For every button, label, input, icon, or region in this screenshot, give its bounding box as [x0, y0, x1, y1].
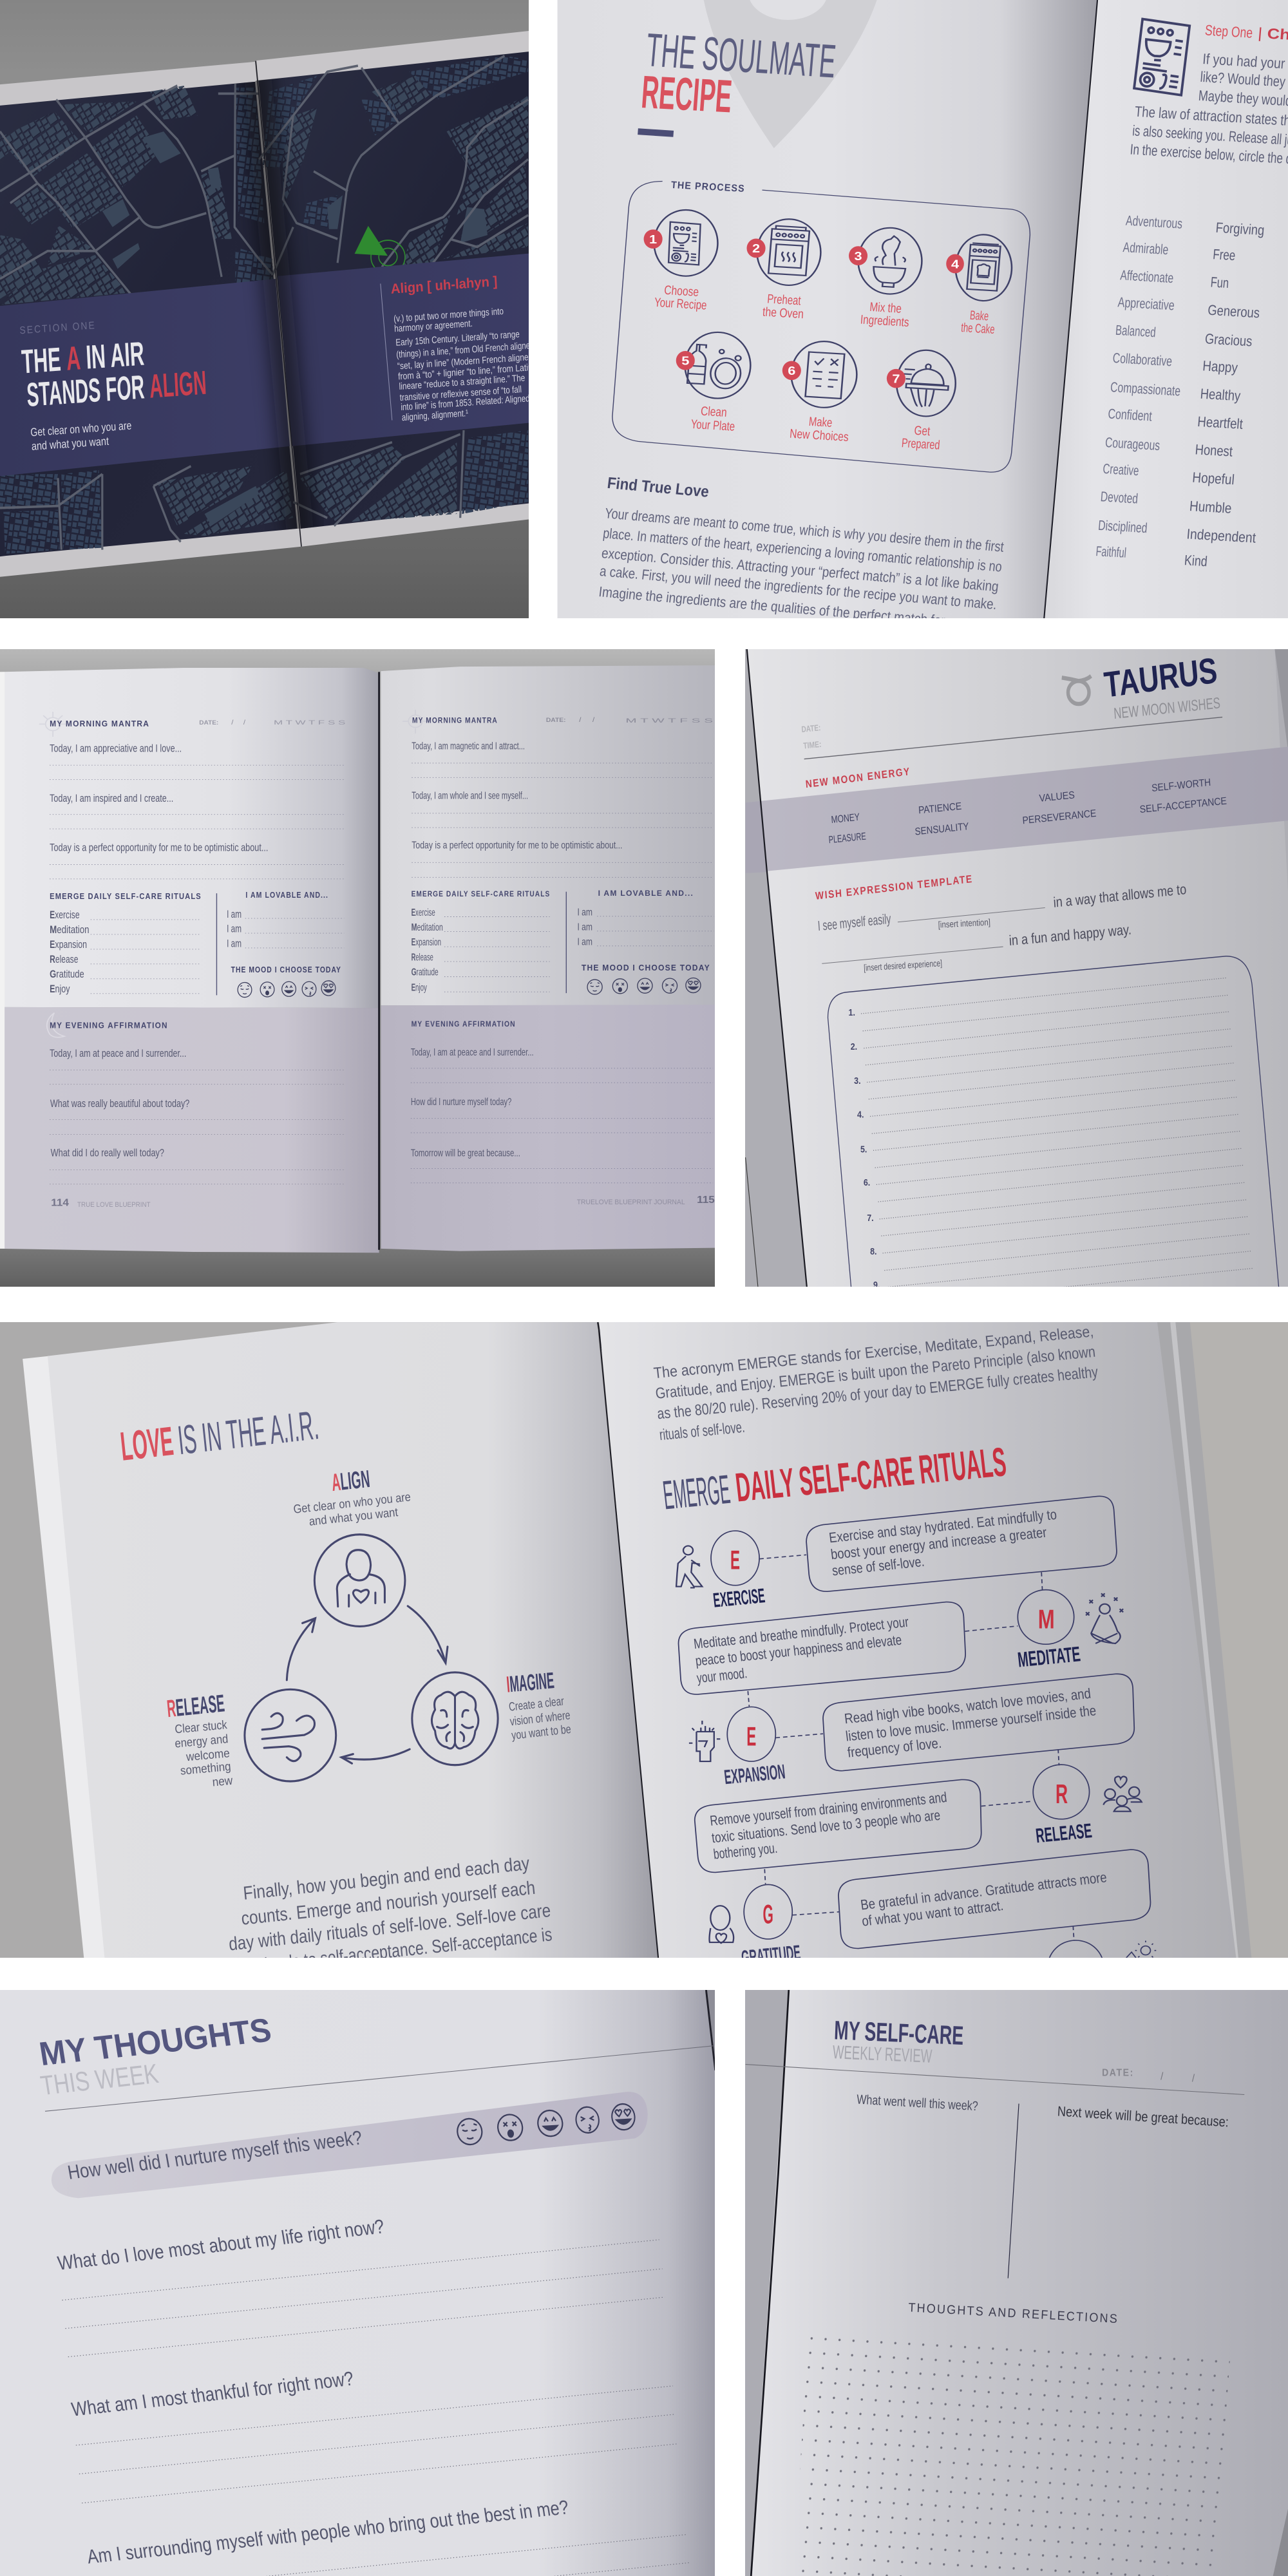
- release label: new: [212, 1773, 233, 1789]
- body text: a cake. First, you will need the ingredients for the recipe you want to make.: [599, 564, 998, 613]
- intro paragraph: rituals of self-love.: [659, 1419, 746, 1444]
- energy keywords: VALUES: [1039, 790, 1075, 804]
- morning prompts: [412, 740, 713, 877]
- panel: the soulmate recipe spread: THE SOULMATE: [644, 23, 838, 88]
- morning mantra header: M T W T F S S: [274, 719, 345, 726]
- question: love most: [56, 2215, 665, 2357]
- step 5: clean your plate: [676, 332, 750, 433]
- panel: the process box: THE PROCESS: [670, 179, 745, 194]
- definition text: from à “to” + lignier “to line,” from Latin: [398, 361, 533, 382]
- definition text: (v.) to put two or more things into: [393, 305, 504, 324]
- new moon energy heading: NEW MOON ENERGY: [805, 766, 911, 791]
- mood selector: THE MOOD I CHOOSE TODAY: [231, 965, 341, 974]
- evening affirmation: What was really beautiful about today?: [50, 1097, 189, 1110]
- date and time: DATE:: [801, 723, 821, 734]
- question: surrounding myself: [86, 2496, 689, 2576]
- date and time: TIME:: [803, 739, 822, 751]
- step: release: R: [1056, 1780, 1068, 1810]
- align label: Get clear on who you are: [293, 1490, 412, 1516]
- step 7: get prepared: [887, 350, 956, 452]
- wish list box: 9.: [873, 1280, 880, 1290]
- morning mantra header: M T W T F S S: [625, 717, 713, 724]
- mood selector: THE MOOD I CHOOSE TODAY: [582, 963, 710, 972]
- page footer 115: [577, 1195, 715, 1206]
- question: next week: Next week will be great because:: [1057, 2104, 1229, 2130]
- step 4: bake the cake: [946, 234, 1012, 337]
- map roads: [0, 56, 528, 550]
- i am lovable list: [227, 891, 344, 949]
- quality word list, column two: Hopeful: [1191, 469, 1235, 488]
- title: MY THOUGHTS: [37, 2012, 274, 2073]
- body text: Imagine the ingredients are the qualities of the perfect match for you.: [598, 584, 972, 632]
- definition text: aligning, alignment.¹: [401, 407, 469, 422]
- title: [639, 23, 838, 122]
- definition text: transitive or reflexive sense of “to fall: [399, 383, 522, 403]
- step: release: RELEASE: [1034, 1819, 1093, 1847]
- mood selector: [231, 965, 341, 998]
- step 7: get prepared: Prepared: [901, 435, 940, 452]
- body text: Your dreams are meant to come true, which is why you desire them in the first: [604, 506, 1005, 555]
- step: release: toxic situations. Send love to 3 people who are: [711, 1807, 941, 1846]
- step: expansion: frequency of love.: [846, 1735, 942, 1761]
- quality word list, column two: Humble: [1189, 498, 1232, 516]
- mood selector: [582, 963, 710, 994]
- quality word list, column two: Healthy: [1200, 386, 1242, 404]
- quality word list, column two: Independent: [1186, 526, 1256, 546]
- imagine label: IMAGINE: [506, 1669, 555, 1698]
- quality word list, column one: [1095, 213, 1183, 561]
- icon: faint moon: [47, 1013, 64, 1037]
- emerge checklist: Expansion: [50, 938, 87, 951]
- release label: RELEASE: [166, 1689, 226, 1722]
- question: most thankful: What am I most thankful for right now?: [70, 2368, 355, 2421]
- emerge checklist: Gratitude: [412, 967, 439, 978]
- step 6: make new choices: 6: [788, 365, 795, 378]
- evening affirmation: MY EVENING AFFIRMATION: [50, 1021, 168, 1030]
- step: meditate: [679, 1590, 1123, 1707]
- energy keywords: PERSEVERANCE: [1022, 808, 1097, 827]
- morning prompts: [50, 743, 345, 879]
- morning mantra header: DATE:: [546, 717, 566, 724]
- i am lovable list: I AM LOVABLE AND...: [245, 891, 328, 900]
- quality word list, column one: Admirable: [1122, 240, 1169, 258]
- step one text: Step One: [1204, 22, 1253, 41]
- definition text: lineare “reduce to a straight line.” The: [399, 372, 526, 392]
- definition heading: Align [ uh-lahyn ]: [390, 274, 498, 297]
- i am lovable list: I am: [227, 908, 242, 920]
- wish template sentence: in a way that allows me to: [1053, 882, 1187, 911]
- definition text: [393, 305, 534, 422]
- morning prompts: Today is a perfect opportunity for me to be optimistic about...: [50, 841, 268, 853]
- body text: [598, 506, 1005, 632]
- panel: taurus new moon wishes: [745, 649, 1288, 1305]
- step: gratitude: Be grateful in advance. Gratitude attracts more: [860, 1869, 1108, 1913]
- imagine label: vision of where: [509, 1708, 571, 1728]
- title: MY SELF-CARE: [833, 2016, 964, 2050]
- heading: [661, 1439, 1009, 1518]
- i am lovable list: I am: [577, 936, 592, 947]
- step: expansion: Read high vibe books, watch love movies, and: [844, 1685, 1092, 1727]
- quality word list, column one: Balanced: [1115, 323, 1157, 341]
- evening affirmation: Today, I am at peace and I surrender...: [411, 1046, 534, 1058]
- map buildings: [0, 56, 528, 554]
- morning mantra header: [50, 719, 345, 728]
- emerge checklist: EMERGE DAILY SELF-CARE RITUALS: [50, 892, 202, 901]
- subtitle: WEEKLY REVIEW: [832, 2041, 933, 2067]
- panel: my self-care weekly review: [745, 1990, 1288, 2576]
- energy keywords: SELF-ACCEPTANCE: [1139, 796, 1227, 815]
- evening affirmation: MY EVENING AFFIRMATION: [412, 1019, 516, 1028]
- step: gratitude: of what you want to attract.: [861, 1897, 1005, 1929]
- step 4: bake the cake: 4: [951, 258, 960, 271]
- question: love most: What do I love most about my life right now?: [56, 2215, 386, 2275]
- step: meditate: your mood.: [696, 1665, 748, 1686]
- i am lovable list: I am: [227, 923, 242, 935]
- step: exercise: [676, 1496, 1117, 1611]
- step 7: get prepared: Get: [914, 422, 931, 439]
- section title: THE A IN AIR: [21, 335, 145, 381]
- subtitle: NEW MOON WISHES: [1113, 694, 1221, 722]
- quality word list, column two: Free: [1212, 247, 1236, 264]
- evening affirmation: What did I do really well today?: [51, 1146, 164, 1159]
- morning prompts: Today, I am appreciative and I love...: [50, 743, 182, 755]
- imagine label: [506, 1669, 572, 1742]
- body text: exception. Consider this. Attracting your “perfect match” is a lot like baking: [601, 545, 999, 595]
- emerge checklist: Exercise: [412, 907, 435, 918]
- morning mantra header: /: [231, 719, 234, 726]
- question: most thankful: [70, 2368, 679, 2503]
- section title: STANDS FOR ALIGN: [26, 364, 207, 414]
- panel: love is in the air and emerge rituals spread: [0, 1320, 1288, 1994]
- morning prompts: Today, I am inspired and I create...: [50, 792, 173, 804]
- panel: my thoughts this week: [0, 1990, 717, 2576]
- heading: find true love: Find True Love: [606, 474, 710, 500]
- emerge checklist: [50, 892, 202, 995]
- definition text: into line” is from 1853. Related: Aligned,: [401, 392, 532, 412]
- left page: [0, 1320, 659, 1975]
- wish expression heading: WISH EXPRESSION TEMPLATE: [815, 873, 973, 902]
- morning mantra header: /: [243, 719, 246, 726]
- date field: [1102, 2068, 1195, 2085]
- icon: green map marker: [354, 225, 406, 268]
- panel: the process box: [612, 179, 1030, 472]
- definition text: “set, lay in line” (Modern French aligner): [397, 351, 534, 372]
- step 6: make new choices: Make: [808, 414, 833, 430]
- step 6: make new choices: New Choices: [789, 426, 849, 444]
- step: meditate: MEDITATE: [1016, 1642, 1082, 1672]
- date and time: [801, 723, 822, 751]
- quality word list, column one: Courageous: [1104, 435, 1160, 454]
- step: exercise: sense of self-love.: [831, 1553, 925, 1578]
- step 1: choose your recipe: [644, 210, 717, 312]
- wish template sentence: [insert intention]: [938, 917, 990, 930]
- step: meditate: peace to boost your happiness and elevate: [694, 1631, 902, 1669]
- quality word list, column one: Confident: [1108, 406, 1153, 424]
- page footer 115: 115: [697, 1195, 715, 1206]
- question: went well: What went well this week?: [857, 2092, 978, 2114]
- heading: EMERGE: [661, 1466, 732, 1518]
- step: meditate: M: [1038, 1605, 1055, 1634]
- i am lovable list: I am: [577, 921, 592, 933]
- panel: daily journal spread, pages 114-115: [0, 649, 715, 1287]
- step 3: mix the ingredients: 3: [854, 250, 862, 263]
- evening affirmation: How did I nurture myself today?: [411, 1096, 511, 1108]
- icon: wind: [245, 1689, 336, 1781]
- quality word list, column one: Collaborative: [1112, 351, 1173, 370]
- emerge checklist: Enjoy: [412, 981, 427, 993]
- title: RECIPE: [639, 66, 734, 122]
- step: gratitude: [710, 1850, 1150, 1969]
- dot grid: [793, 2335, 1230, 2576]
- energy keywords: [828, 777, 1227, 846]
- reflections heading: THOUGHTS AND REFLECTIONS: [908, 2300, 1119, 2325]
- energy keywords: PATIENCE: [918, 801, 962, 817]
- wish list box: 5.: [860, 1144, 867, 1155]
- evening affirmation: Today, I am at peace and I surrender...: [50, 1047, 186, 1059]
- morning mantra header: MY MORNING MANTRA: [50, 719, 149, 728]
- purple title band: [0, 253, 535, 476]
- morning mantra header: DATE:: [199, 719, 218, 726]
- emerge checklist: EMERGE DAILY SELF-CARE RITUALS: [412, 889, 550, 898]
- emerge checklist: Exercise: [50, 909, 80, 921]
- step: meditate: Meditate and breathe mindfully. Protect your: [693, 1613, 910, 1652]
- step: expansion: EXPANSION: [723, 1760, 786, 1788]
- section subtitle: and what you want: [31, 435, 109, 453]
- section title: [21, 342, 206, 406]
- intro paragraph: The acronym EMERGE stands for Exercise, Meditate, Expand, Release,: [653, 1323, 1094, 1382]
- step: gratitude: G: [763, 1900, 773, 1929]
- quality word list, column one: Faithful: [1095, 544, 1127, 561]
- quality word list, column one: Compassionate: [1110, 380, 1181, 399]
- icon: faint sun: [402, 710, 429, 734]
- section label: SECTION ONE: [19, 319, 96, 337]
- step 1: choose your recipe: Choose: [664, 283, 699, 299]
- step: release: Remove yourself from draining environments and: [709, 1789, 948, 1829]
- icon: recipe card: [1134, 19, 1190, 95]
- closing paragraph: counts. Emerge and nourish yourself each: [240, 1877, 536, 1929]
- heading: IS IN THE A.I.R.: [176, 1403, 321, 1464]
- section subtitle: [30, 419, 132, 453]
- energy keywords: PLEASURE: [828, 831, 866, 846]
- quality word list, column two: Kind: [1184, 553, 1208, 570]
- section subtitle: Get clear on who you are: [30, 419, 132, 439]
- i am lovable list: [577, 889, 714, 947]
- i am lovable list: I AM LOVABLE AND...: [598, 889, 694, 898]
- subtitle: THIS WEEK: [39, 2058, 160, 2101]
- page footer 115: TRUELOVE BLUEPRINT JOURNAL: [577, 1198, 685, 1206]
- date field: /: [1160, 2071, 1164, 2083]
- quality word list, column one: Affectionate: [1119, 268, 1174, 287]
- wish list box: 1.: [849, 1007, 855, 1018]
- emerge checklist: Release: [50, 953, 78, 965]
- quality word list, column two: Happy: [1202, 358, 1239, 376]
- emerge checklist: [412, 889, 550, 993]
- step 7: get prepared: 7: [892, 373, 900, 386]
- energy keywords: SENSUALITY: [914, 821, 969, 838]
- step 5: clean your plate: Your Plate: [690, 417, 735, 433]
- quality word list, column two: Gracious: [1204, 331, 1253, 350]
- evening affirmation: Tomorrow will be great because...: [411, 1147, 520, 1159]
- mood question pill: [52, 2092, 648, 2198]
- quality word list, column two: [1184, 220, 1265, 570]
- icon: background location pin: [704, 0, 877, 148]
- evening affirmation: [50, 1021, 345, 1184]
- imagine label: Create a clear: [508, 1694, 565, 1714]
- imagine label: you want to be: [511, 1722, 572, 1742]
- closing paragraph: Finally, how you begin and end each day: [242, 1853, 531, 1904]
- step: expansion: [689, 1674, 1134, 1788]
- icon: faint sun: [39, 712, 67, 737]
- closing paragraph: day with daily rituals of self-love. Self-love care: [228, 1900, 552, 1955]
- align label: [293, 1464, 412, 1528]
- step 4: bake the cake: the Cake: [960, 320, 996, 337]
- emerge checklist: Expansion: [412, 936, 441, 948]
- step 3: mix the ingredients: [849, 228, 922, 330]
- definition text: harmony or agreement.: [394, 317, 473, 334]
- wish list box: 3.: [854, 1075, 861, 1086]
- morning prompts: Today, I am whole and I see myself...: [412, 790, 528, 801]
- quality word list, column one: Creative: [1103, 462, 1139, 479]
- step: gratitude: GRATITUDE: [740, 1940, 802, 1969]
- quality word list, column one: Appreciative: [1117, 295, 1175, 314]
- arrow: release to align: [287, 1618, 316, 1680]
- step 2: preheat the oven: the Oven: [762, 304, 804, 321]
- step 3: mix the ingredients: Ingredients: [860, 312, 910, 330]
- step 2: preheat the oven: [747, 219, 820, 321]
- step: exercise: Exercise and stay hydrated. Eat mindfully to: [828, 1506, 1057, 1546]
- arrow: imagine to release: [341, 1749, 410, 1763]
- wish list box: 4.: [857, 1109, 864, 1120]
- closing paragraph: leads to self-acceptance. Self-acceptance is: [264, 1924, 553, 1975]
- step 6: make new choices: [782, 341, 857, 444]
- panel: the soulmate recipe spread: [557, 0, 1288, 632]
- release label: something: [180, 1759, 231, 1777]
- heading: LOVE: [118, 1419, 175, 1470]
- wish template sentence: [insert desired experience]: [864, 958, 942, 973]
- wish list box: 8.: [870, 1246, 877, 1256]
- definition text: (things) in a line,” from Old French aligner: [396, 339, 533, 360]
- i am lovable list: I am: [227, 938, 242, 949]
- quality word list, column two: Fun: [1210, 274, 1229, 292]
- intro paragraph: [653, 1323, 1099, 1444]
- morning prompts: Today, I am magnetic and I attract...: [412, 740, 525, 752]
- step: expansion: E: [746, 1722, 756, 1752]
- morning mantra header: /: [592, 717, 595, 724]
- wish template sentence: [817, 882, 1187, 973]
- quality word list, column one: Adventurous: [1125, 213, 1183, 232]
- panel: section one map spread: [0, 0, 535, 618]
- left page: [39, 712, 345, 1209]
- release label: welcome: [185, 1746, 231, 1764]
- step: exercise: EXERCISE: [712, 1584, 766, 1611]
- emerge checklist: Release: [412, 952, 433, 963]
- wish template sentence: I see myself easily: [817, 911, 892, 934]
- energy keywords: MONEY: [831, 812, 860, 826]
- align label: and what you want: [308, 1505, 399, 1528]
- release label: [166, 1689, 233, 1789]
- step 1: choose your recipe: Your Recipe: [654, 294, 707, 312]
- release label: Clear stuck: [175, 1718, 228, 1736]
- step 1: choose your recipe: 1: [649, 233, 657, 247]
- wish list box: 6.: [864, 1177, 870, 1188]
- quality word list, column one: Disciplined: [1097, 518, 1148, 536]
- emerge checklist: Meditation: [412, 922, 443, 933]
- quality word list, column two: Heartfelt: [1197, 414, 1244, 433]
- step: release: [695, 1749, 1142, 1884]
- step 5: clean your plate: Clean: [700, 403, 728, 420]
- i am lovable list: I am: [577, 906, 592, 918]
- date field: DATE:: [1102, 2068, 1134, 2079]
- quality word list, column two: Forgiving: [1215, 220, 1265, 239]
- step: exercise: boost your energy and increase a greater: [830, 1524, 1048, 1562]
- icon: brain: [412, 1672, 498, 1765]
- morning mantra header: MY MORNING MANTRA: [412, 715, 498, 724]
- emerge checklist: Enjoy: [50, 983, 70, 995]
- body text: place. In matters of the heart, experiencing a loving romantic relationship is no: [602, 526, 1003, 575]
- morning mantra header: /: [579, 717, 582, 724]
- page footer 114: [51, 1197, 151, 1209]
- quality word list, column two: Generous: [1207, 302, 1260, 321]
- intro paragraph: as the 80/20 rule). Reserving 20% of your day to EMERGE fully creates healthy: [656, 1363, 1099, 1423]
- release label: energy and: [175, 1732, 229, 1750]
- mood question pill: How well did I nurture myself this week?: [66, 2127, 364, 2184]
- page footer 114: 114: [51, 1197, 69, 1208]
- evening affirmation: [411, 1019, 713, 1183]
- emerge checklist: Gratitude: [50, 968, 84, 980]
- icon: person with heart: [314, 1535, 405, 1626]
- quality word list, column two: Honest: [1195, 442, 1233, 460]
- emerge checklist: Meditation: [50, 923, 90, 936]
- energy keywords: SELF-WORTH: [1151, 777, 1211, 794]
- step 5: clean your plate: 5: [681, 355, 689, 368]
- closing paragraph: [228, 1853, 553, 1975]
- step 2: preheat the oven: 2: [752, 243, 760, 256]
- quality word list, column one: Devoted: [1100, 489, 1139, 507]
- heading: [118, 1403, 321, 1470]
- right page: [402, 710, 715, 1206]
- wish list box: [828, 956, 1280, 1305]
- definition text: Early 15th Century. Literally “to range: [395, 328, 520, 348]
- step one text: [1130, 22, 1288, 169]
- page footer 114: TRUE LOVE BLUEPRINT: [77, 1201, 151, 1209]
- step: release: bothering you.: [712, 1840, 778, 1862]
- step: exercise: E: [730, 1546, 740, 1575]
- step 2: preheat the oven: Preheat: [766, 291, 802, 308]
- align label: ALIGN: [330, 1464, 371, 1496]
- right page: [599, 1320, 1288, 1994]
- intro paragraph: Gratitude, and Enjoy. EMERGE is built upon the Pareto Principle (also known: [654, 1343, 1096, 1403]
- wish template sentence: in a fun and happy way.: [1009, 922, 1132, 949]
- icon: taurus symbol: [1062, 676, 1091, 704]
- taurus title: TAURUS: [1103, 650, 1219, 706]
- step: enjoy, partly cropped: [1048, 1940, 1156, 1994]
- wish list box: 7.: [867, 1213, 874, 1223]
- morning mantra header: [412, 715, 713, 724]
- step: expansion: listen to love music. Immerse yourself inside the: [845, 1702, 1097, 1744]
- morning prompts: Today is a perfect opportunity for me to be optimistic about...: [412, 839, 622, 851]
- date field: /: [1192, 2073, 1195, 2085]
- question: surrounding myself: Am I surrounding myself with people who bring out the best in me?: [86, 2496, 570, 2568]
- wish list box: 2.: [851, 1041, 857, 1052]
- step 3: mix the ingredients: Mix the: [869, 299, 902, 316]
- step 4: bake the cake: Bake: [969, 308, 989, 323]
- arrow: align to imagine: [408, 1606, 448, 1663]
